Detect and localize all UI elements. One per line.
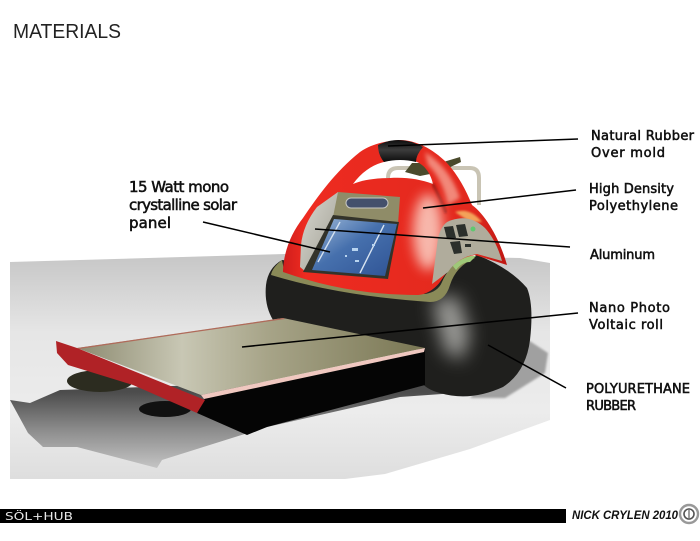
callout: nano photo voltaic: Voltaic roll [589,318,663,333]
aluminum side panel [300,192,338,272]
red tray end cap [56,341,205,413]
tray front edge [201,348,425,399]
title: MATERIALS [13,21,121,43]
solar cell panel [312,219,397,276]
icon: author logo [680,505,698,523]
tray feet [67,370,133,392]
callout: polyethylene [423,182,678,214]
callout: solar panel: panel [129,214,171,232]
footer bar with brand: SÖL+HUB [5,510,73,523]
author credit: NICK CRYLEN 2010 [572,510,679,522]
right control panel [432,218,502,284]
body highlight [432,296,470,360]
callout: aluminum [315,229,655,263]
dome highlight [413,194,443,270]
black base body [266,255,531,396]
callout: polyethylene: High Density [589,182,674,197]
handle highlight [425,152,460,205]
callout: solar panel: 15 Watt mono [129,178,229,196]
callout: natural rubber [388,129,695,161]
floor with cast shadow [10,254,550,479]
right lobe highlight [455,211,482,222]
callout: natural rubber: Natural Rubber [591,129,695,144]
power indicator [470,226,476,232]
solar panel speckles [345,244,375,262]
callout: nano photo voltaic [242,301,670,347]
callout: natural rubber: Over mold [591,146,665,161]
callout: solar panel [129,178,330,252]
tray underside [197,349,425,435]
callout: polyethylene: Polyethylene [589,199,678,214]
callout: polyurethane: RUBBER [586,399,636,414]
black rubber grip [378,140,423,162]
rear clamp [405,157,461,176]
control buttons [444,224,471,254]
callout: polyurethane [488,345,690,414]
green glow [452,256,476,270]
callout: aluminum: Aluminum [590,248,655,263]
callout: polyurethane: POLYURETHANE [586,382,690,397]
display bezel [333,192,400,224]
screen frame [303,215,399,279]
status display pill [346,198,388,208]
product: solar hub device [56,140,531,435]
red shell and carry handle [283,140,507,295]
tray far edge [77,318,285,349]
olive trim strip [271,258,475,302]
solar panel grid lines [318,222,384,273]
footer bar with brand [0,509,566,523]
rear tube handle [388,168,479,205]
callout: nano photo voltaic: Nano Photo [589,301,670,316]
callout: solar panel: crystalline solar [129,196,238,214]
tray solar surface [77,318,425,395]
handle edge shadow [433,184,446,213]
